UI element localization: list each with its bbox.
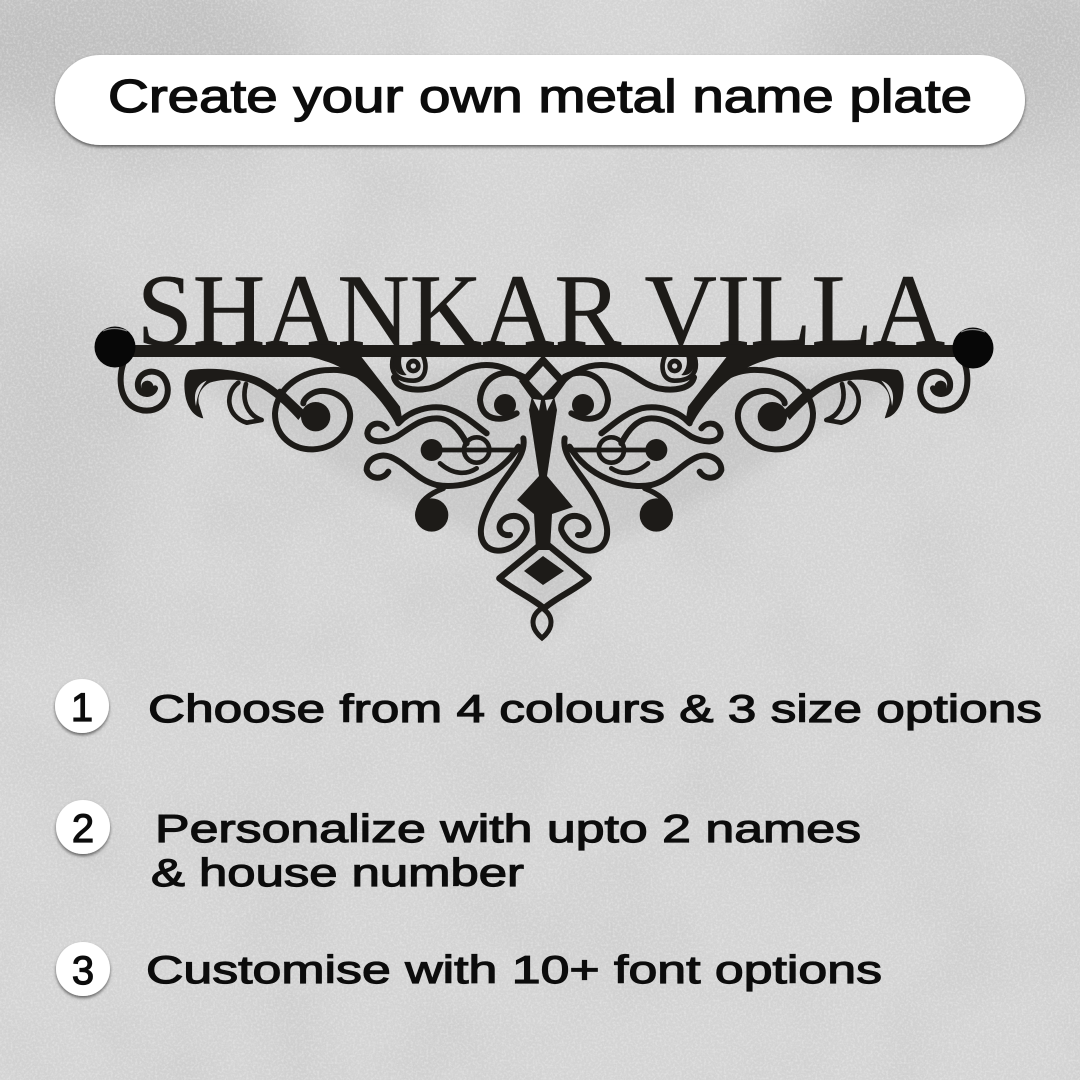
step 3 text: Customise with 10+ font options — [146, 949, 882, 992]
top diamond — [519, 355, 567, 399]
lower filled diamond — [524, 556, 564, 585]
step 2 text: & house number — [151, 852, 524, 895]
number badge 2 — [56, 800, 110, 854]
small loop under bar — [392, 357, 425, 381]
step 2 text — [151, 808, 861, 895]
step 1 — [55, 679, 1042, 733]
number badge 2: 2 — [72, 807, 94, 851]
number badge 1 — [55, 679, 109, 733]
step 2 — [56, 800, 861, 895]
tapered branch from bar — [303, 355, 402, 426]
sign lettering: SHANKAR VILLA — [137, 254, 945, 368]
name plate soft wall shadow — [183, 373, 913, 638]
lower ball stem — [418, 488, 443, 513]
crescent leaf — [229, 383, 262, 423]
S-curve to top spiral — [394, 365, 530, 390]
large spiral — [275, 370, 397, 449]
tail loop — [533, 608, 551, 638]
lower frame — [499, 542, 544, 608]
right scrollwork mirrored — [544, 355, 967, 608]
top spiral ball — [494, 394, 516, 416]
outer wave — [481, 438, 527, 551]
lower ball — [415, 498, 448, 532]
horizontal stem through rings — [433, 443, 518, 457]
central spine and diamonds — [517, 355, 573, 638]
centre spike — [517, 396, 573, 550]
spike cut-outs — [533, 399, 553, 411]
left end curl — [121, 363, 168, 411]
left scrollwork — [121, 355, 544, 608]
right wall pin — [952, 328, 994, 368]
left wall pin — [94, 326, 136, 368]
lower mid scroll — [367, 447, 518, 486]
mid ball — [421, 439, 443, 461]
spiral centre ball — [301, 402, 330, 431]
title banner — [55, 55, 1025, 145]
top bar — [115, 345, 975, 357]
step 3 — [56, 942, 882, 996]
step 2 text: Personalize with upto 2 names — [155, 808, 861, 851]
number badge 3 — [56, 942, 110, 996]
upper mid scroll — [367, 418, 467, 443]
name plate: SHANKAR VILLA metal sign — [94, 254, 994, 638]
title text: Create your own metal name plate — [108, 70, 972, 122]
number badge 1: 1 — [71, 686, 93, 730]
number badge 3: 3 — [72, 949, 94, 993]
acanthus leaf — [184, 369, 303, 420]
step 1 text: Choose from 4 colours & 3 size options — [148, 688, 1042, 731]
